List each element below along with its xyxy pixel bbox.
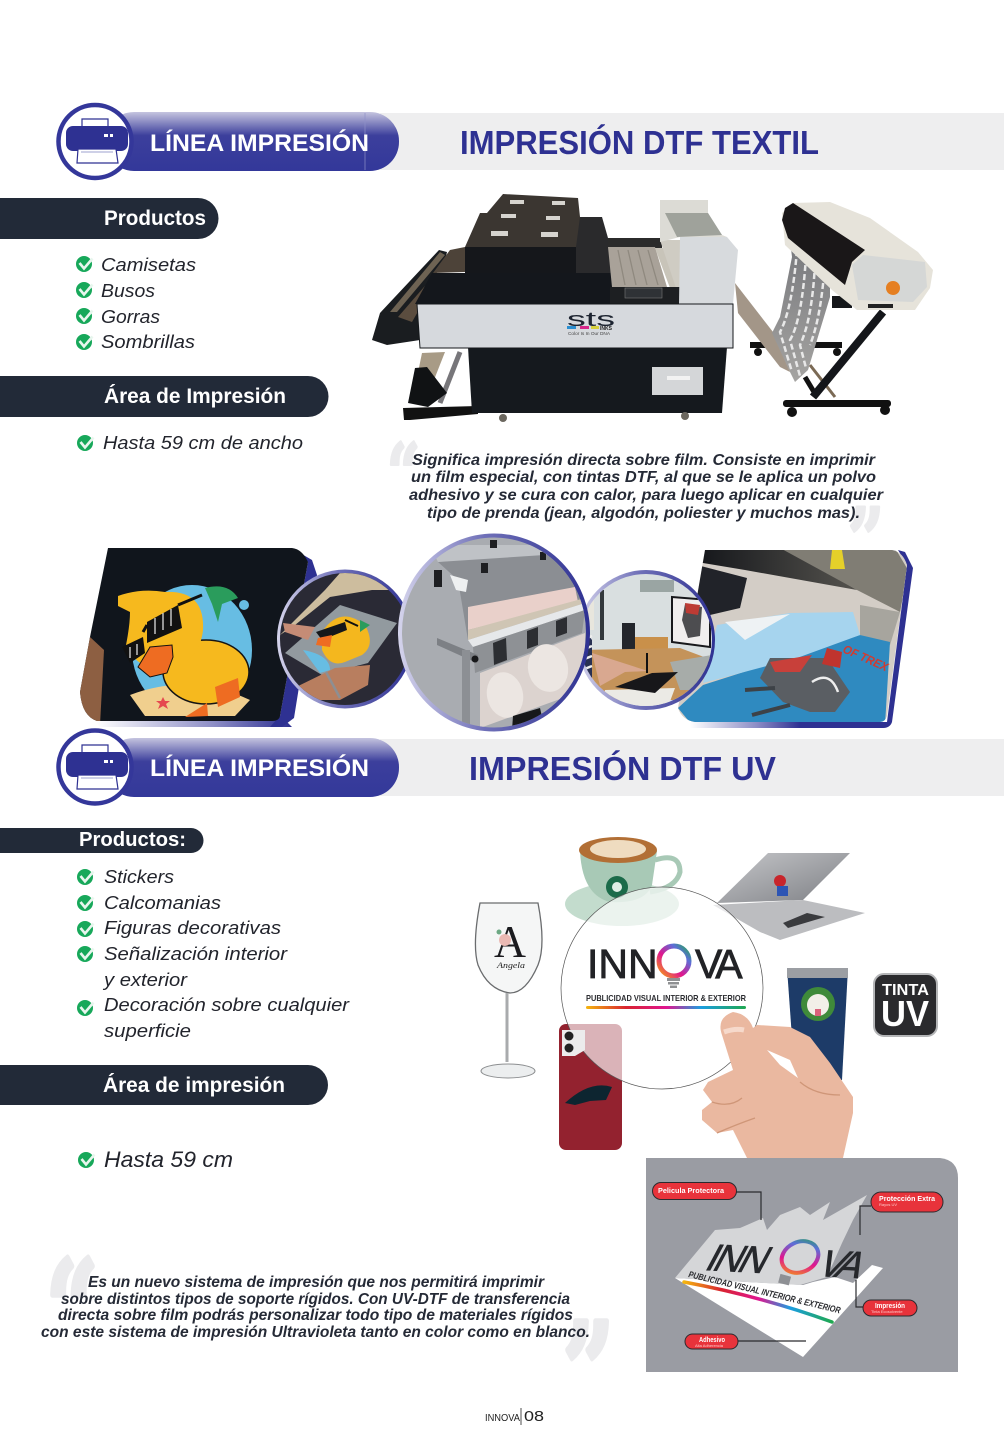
phone case [559,1024,622,1150]
label: película protectora [652,1182,736,1200]
label: adhesivo: Adhesivo [699,1337,725,1344]
logo tagline: PUBLICIDAD VISUAL INTERIOR & EXTERIOR [586,993,746,1003]
photo: t-shirt with duck print [80,548,317,727]
label: adhesivo [685,1334,738,1349]
lower cabinet [468,347,727,422]
laptop [713,853,865,940]
tilted tagline: PUBLICIDAD VISUAL INTERIOR & EXTERIOR [688,1269,842,1315]
heading pill: área de impresión: Área de impresión [103,1074,285,1097]
tilted INNOVA print [699,1235,875,1286]
list item: busos [76,281,155,301]
footer: page number: INNOVA [485,1413,520,1424]
pill: línea impresión [105,112,399,171]
sticker white base [675,1265,883,1357]
heading pill: área de impresión: Área de Impresión [104,385,286,408]
heading pill: área de impresión [0,1065,328,1105]
dinosaur print: OF TREX [841,642,891,675]
illustration: DTF printing machine [372,194,933,422]
rear roller stand [403,352,478,420]
list item: decoración: Decoración sobre cualquier [104,995,350,1015]
quote text: con este sistema de impresión Ultravioleta tanto en color como en blanco. [41,1324,590,1341]
pill: línea impresión: LÍNEA IMPRESIÓN [150,129,369,157]
wine glass: A [494,916,526,967]
connector lines [736,1192,871,1341]
quote text: adhesivo y se cura con calor, para luego aplicar en cualquier [409,487,884,504]
quote text: Es un nuevo sistema de impresión que nos permitirá imprimir [88,1274,545,1291]
list item: gorras: Gorras [101,307,160,327]
duck artwork [118,585,252,717]
footer: page number [485,1408,544,1425]
phone camera seen through lens [562,1030,585,1056]
photo circle: DTF printer close-up [395,530,595,735]
header band: línea impresión DTF UV [58,730,1004,804]
quote: definición DTF textil [387,426,884,590]
list item: stickers [77,867,174,887]
tilted INNOVA print: INN [699,1238,777,1281]
panel: productos textil [0,198,218,352]
list item: decoración: superficie [104,1021,191,1041]
wide-format printer [782,202,933,310]
badge: tinta UV: TINTA [882,982,929,999]
label: protección extra: Protección Extra [879,1196,935,1203]
quote: definición UV-DTF [41,1232,614,1447]
list item: calcomanías: Calcomanias [104,893,221,913]
STS logo: INKS [600,326,613,332]
list item: camisetas: Camisetas [101,255,196,275]
label: impresión [863,1300,917,1316]
dinosaur print [745,642,891,715]
photo circle: office designer [583,570,715,710]
wine glass [475,903,542,1078]
quote text: un film especial, con tintas DTF, al que se le aplica un polvo [411,469,876,486]
tilted INNOVA print: VA [810,1243,875,1286]
heading pill: productos: Productos [104,207,206,230]
list item: figuras decorativas: Figuras decorativas [104,918,281,938]
STS logo: sts [567,309,615,331]
INNOVA logo [587,941,743,988]
list item: busos: Busos [101,281,155,301]
STS logo [567,309,615,336]
quote text: Significa impresión directa sobre film. Consiste en imprimir [412,452,876,469]
quote text [41,1274,590,1341]
footer: page number: 08 [524,1408,544,1425]
panel: productos UV [0,828,350,1041]
list item: señalización: y exterior [102,970,188,990]
INNOVA logo: VA [695,941,743,987]
photo circle: hands pressing sheet [277,570,406,708]
label: protección extra: Rayos UV [879,1202,897,1207]
list item: señalización [77,944,288,990]
badge: tinta UV: UV [881,993,929,1034]
coffee cup [565,837,680,926]
heading pill: productos [0,198,218,239]
photo strip: DTF applications [70,530,915,735]
label: adhesivo: Alta Adherencia [695,1343,724,1348]
panel: área de impresión textil [0,376,328,453]
icon: printer badge [58,730,132,804]
tilted rainbow bar [684,1282,832,1322]
sticker lens with logo [561,887,763,1089]
quote text [409,452,884,522]
film strand [735,283,790,372]
transparent film layer [675,1195,867,1285]
heading: impresión DTF UV: IMPRESIÓN DTF UV [469,750,776,787]
pill: línea impresión: LÍNEA IMPRESIÓN [150,754,369,782]
hand holding sticker [702,1012,853,1158]
panel: UV-DTF layer diagram [646,1158,958,1372]
left tray [372,250,447,345]
list item: stickers: Stickers [104,867,174,887]
quote mark opening: “ [387,426,420,520]
printed film [772,240,830,382]
quote mark opening: “ [46,1232,98,1385]
stepped dryer [415,194,612,304]
pill: línea impresión [105,738,399,797]
list item: señalización: Señalización interior [104,944,288,964]
heading: impresión DTF textil: IMPRESIÓN DTF TEXTIL [460,124,819,161]
label: película protectora: Pelicula Protectora [658,1188,724,1195]
list item: gorras [76,307,160,327]
heading pill: área de impresión [0,376,328,417]
list item: hasta 59 cm: Hasta 59 cm [104,1147,233,1172]
STS logo: Color Is In Our DNA [568,331,610,336]
white front panel [417,304,733,348]
list item: decoración [77,995,350,1041]
header band: línea impresión DTF textil [58,105,1004,178]
label: impresión: Tinta Ecosolvente [871,1309,903,1314]
quote text: directa sobre film podrás personalizar todo tipo de materiales rígidos [58,1307,573,1324]
white coating unit [660,200,738,304]
conveyor platform [608,238,681,304]
label: impresión: Impresión [875,1303,905,1310]
illustration: UV sticker collage [475,837,937,1158]
quote text: tipo de prenda (jean, algodón, poliester y muchos mas). [427,505,860,522]
photo: right t-shirt with printer [670,545,915,730]
quote mark closing: ” [563,1294,614,1447]
list item: hasta 59 cm de ancho: Hasta 59 cm de ancho [103,433,303,453]
panel: área de impresión UV [0,1065,328,1172]
icon: printer badge [58,105,132,178]
quote mark closing: ” [848,490,884,590]
list item: sombrillas: Sombrillas [101,332,195,352]
heading pill: productos [0,828,203,853]
quote text: sobre distintos tipos de soporte rígidos. Con UV-DTF de transferencia [61,1291,570,1308]
tumbler [787,968,848,1080]
wine glass: Angela [496,961,525,970]
printer stand [750,312,891,417]
heading pill: productos: Productos: [79,829,186,851]
label: protección extra [871,1192,943,1212]
badge: tinta UV [874,974,937,1036]
INNOVA logo: INN [587,941,658,987]
